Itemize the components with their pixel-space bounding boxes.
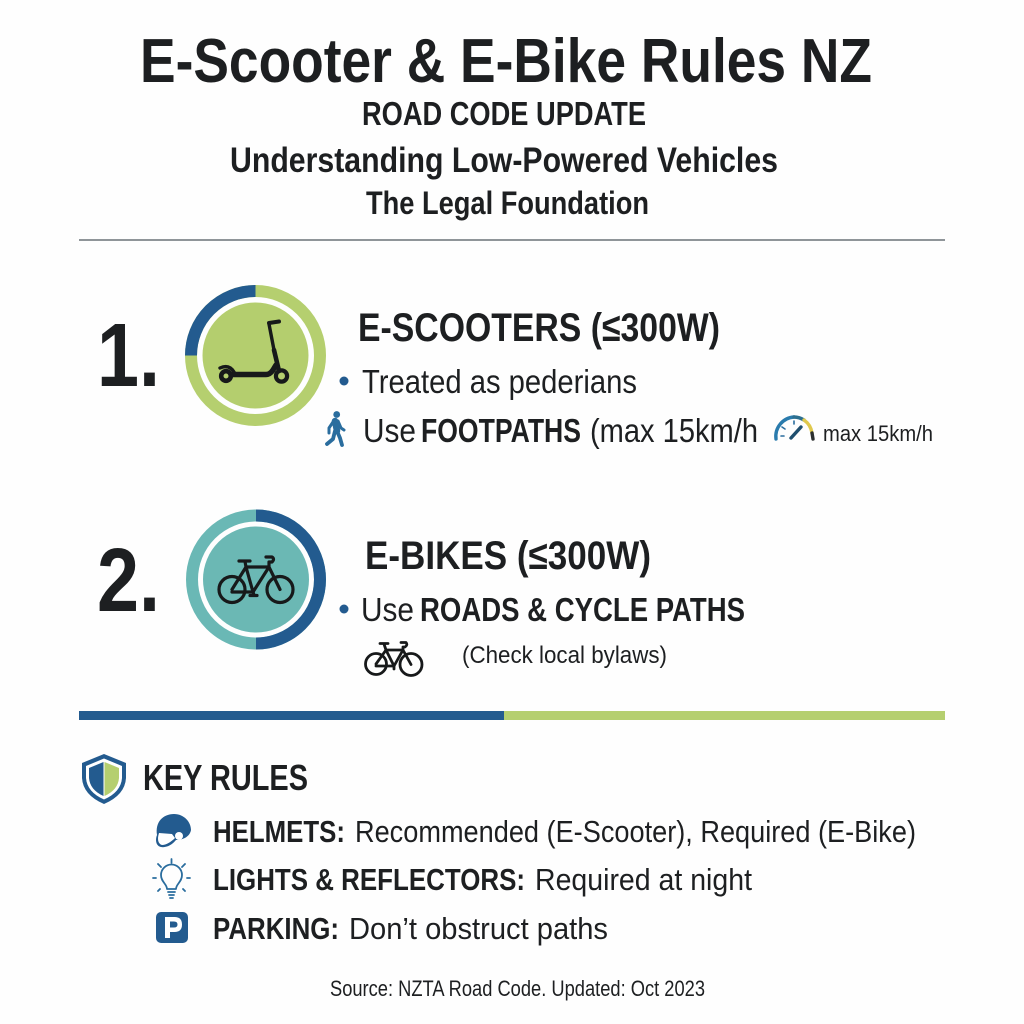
section divider bar xyxy=(79,711,945,720)
icon: e-scooter badge xyxy=(191,291,320,420)
label: max 15km/h: max 15km/h xyxy=(823,421,933,446)
heading: key rules: KEY RULES xyxy=(143,757,308,798)
subtitle: road code update: ROAD CODE UPDATE xyxy=(362,95,646,132)
rule: helmets: Recommended (E-Scooter), Required (E-Bike) xyxy=(355,814,916,849)
rule: lights and reflectors: Required at night xyxy=(535,862,752,897)
rule: lights and reflectors: LIGHTS & REFLECTORS: xyxy=(213,862,525,897)
title: E-Scooter & E-Bike Rules NZ xyxy=(140,27,872,96)
rule: parking xyxy=(156,911,608,946)
text: use footpaths xyxy=(363,412,758,449)
heading: e-scooters: E-SCOOTERS (≤300W) xyxy=(358,306,720,350)
text: use footpaths: FOOTPATHS xyxy=(421,412,581,449)
icon: helmet xyxy=(156,814,191,847)
bullet xyxy=(340,376,348,386)
icon: light bulb xyxy=(153,859,190,898)
bullet xyxy=(340,604,348,614)
text: check local bylaws: (Check local bylaws) xyxy=(462,642,667,669)
source line: Source: NZTA Road Code. Updated: Oct 2023 xyxy=(330,976,705,1001)
rule: parking: PARKING: xyxy=(213,911,339,946)
header block xyxy=(140,27,872,221)
panel: e-scooters xyxy=(97,291,933,449)
icon: parking sign xyxy=(156,912,188,943)
icon: e-bike badge xyxy=(192,516,320,644)
subtitle: understanding low-powered vehicles: Understanding Low-Powered Vehicles xyxy=(230,141,778,180)
subtitle: legal foundation: The Legal Foundation xyxy=(366,185,649,221)
panel: key rules xyxy=(82,754,916,946)
panel: e-bikes xyxy=(97,516,745,676)
rule: lights and reflectors xyxy=(153,859,752,898)
number 1: 1. xyxy=(97,306,160,406)
icon: pedestrian xyxy=(327,411,344,445)
icon: small bicycle xyxy=(366,642,422,676)
rule: helmets: HELMETS: xyxy=(213,814,345,849)
text: use footpaths: (max 15km/h xyxy=(590,412,758,449)
icon: shield xyxy=(82,754,126,804)
text: use footpaths: Use xyxy=(363,412,416,449)
text: use roads and cycle paths: Use xyxy=(361,591,414,628)
number 2: 2. xyxy=(97,531,160,631)
text: use roads and cycle paths: ROADS & CYCLE PATHS xyxy=(420,591,745,628)
icon: speedometer xyxy=(776,417,813,439)
text: treated as pederians: Treated as pederians xyxy=(362,363,637,400)
rule: helmets xyxy=(156,814,916,849)
rule: parking: Don’t obstruct paths xyxy=(349,911,608,946)
icon: bicycle xyxy=(219,557,293,602)
heading: e-bikes: E-BIKES (≤300W) xyxy=(365,534,651,578)
